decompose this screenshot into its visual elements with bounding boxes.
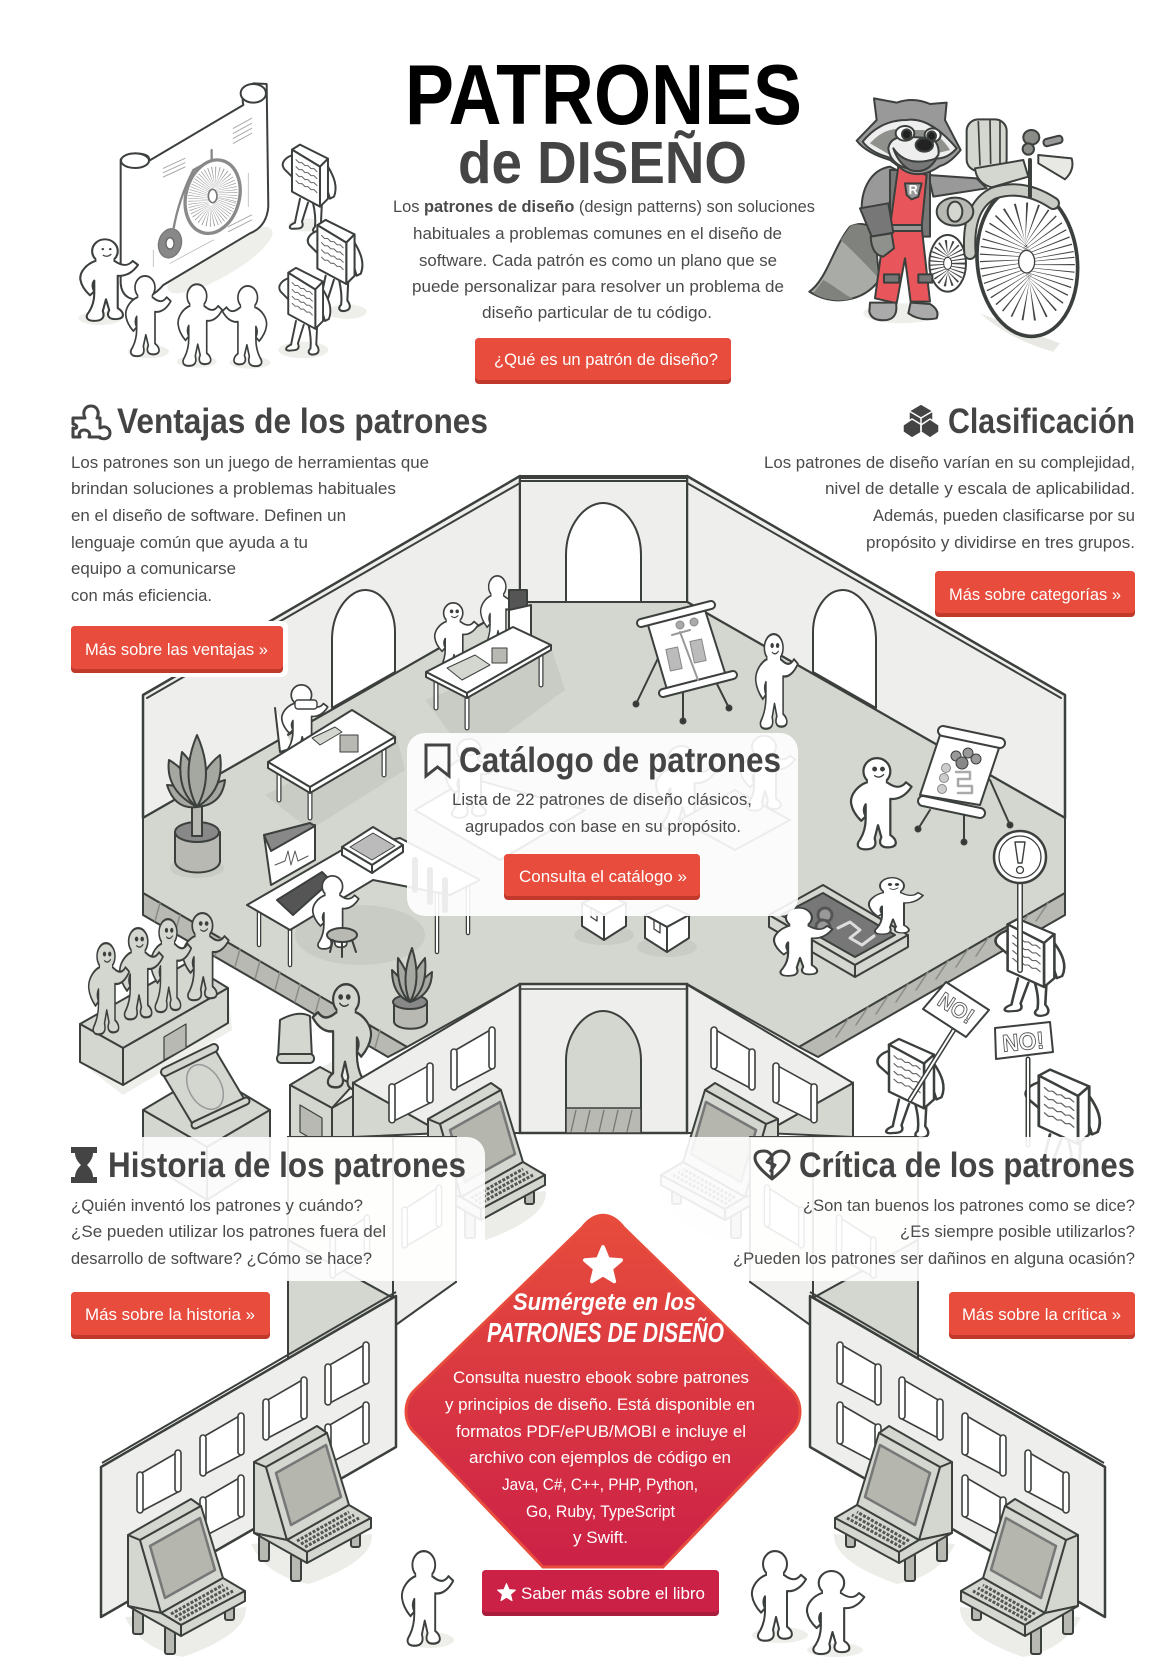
intro paragraph — [393, 197, 815, 322]
plant — [167, 735, 225, 878]
text: clasificacion: Los patrones de diseño varían en su complejidad, — [764, 453, 1135, 472]
button: que es un patron — [475, 338, 731, 384]
ebook text: formatos PDF/ePUB/MOBI e incluye el — [456, 1422, 746, 1441]
button: saber mas sobre el libro — [482, 1570, 719, 1616]
text: clasificacion — [764, 453, 1135, 552]
people near book button — [402, 1551, 864, 1657]
ebook text — [445, 1368, 755, 1547]
desk with masked person — [265, 685, 405, 830]
flipchart with design — [634, 605, 733, 724]
icon: puzzle — [73, 406, 110, 439]
panel: critica overlay — [655, 1137, 1149, 1281]
ebook heading: PATRONES DE DISEÑO — [487, 1317, 724, 1348]
ebook text: Java, C#, C++, PHP, Python, — [502, 1475, 698, 1494]
boxes — [574, 893, 697, 957]
button: critica: Más sobre la crítica » — [962, 1305, 1121, 1324]
paper characters — [283, 145, 336, 233]
protest character with NO! sign: NO! — [933, 987, 979, 1029]
panel: room illustration — [80, 476, 1100, 1200]
icon: star — [585, 1247, 621, 1281]
text: clasificacion: nivel de detalle y escala de aplicabilidad. — [825, 479, 1135, 498]
text: ventajas: lenguaje común que ayuda a tu — [71, 533, 308, 552]
text: ventajas: con más eficiencia. — [71, 586, 212, 605]
button: catalogo: Consulta el catálogo » — [519, 867, 687, 886]
title: PATRONES — [405, 48, 802, 143]
text: historia — [71, 1196, 386, 1268]
text: critica: ¿Es siempre posible utilizarlos? — [900, 1222, 1135, 1241]
blueprint sheet — [121, 83, 268, 299]
floor — [143, 602, 1065, 1047]
protest character with second NO! sign — [995, 1022, 1100, 1175]
kneeling person — [869, 878, 923, 934]
ebook heading: Sumérgete en los — [513, 1289, 696, 1316]
intro paragraph: Los patrones de diseño (design patterns) son soluciones — [393, 197, 815, 216]
ebook text: y Swift. — [573, 1528, 628, 1547]
second plant — [392, 948, 432, 1029]
statue group on pedestal — [80, 913, 232, 1095]
text: catalogo — [452, 790, 752, 836]
people — [80, 239, 138, 321]
button: saber mas sobre el libro: Saber más sobre el libro — [521, 1584, 705, 1603]
intro paragraph: puede personalizar para resolver un problema de — [412, 277, 784, 296]
icon: hourglass — [71, 1147, 97, 1183]
button: ventajas — [66, 621, 288, 677]
button: historia — [71, 1292, 270, 1339]
text: ventajas: equipo a comunicarse — [71, 559, 236, 578]
pedestal with scroll — [143, 1048, 270, 1200]
text: catalogo: agrupados con base en su propósito. — [465, 817, 741, 836]
person pointing — [851, 758, 912, 849]
heading: catalogo: Catálogo de patrones — [459, 741, 781, 780]
bicycle — [929, 235, 966, 292]
text: historia: desarrollo de software? ¿Cómo se hace? — [71, 1249, 372, 1268]
mascot: raccoon with penny-farthing: R — [909, 183, 918, 197]
workstation desk — [247, 823, 480, 965]
ebook text: y principios de diseño. Está disponible en — [445, 1395, 755, 1414]
front room — [353, 984, 853, 1241]
floor ledge stripes — [143, 893, 1065, 1057]
icon: broken heart — [755, 1151, 789, 1179]
text: ventajas: en el diseño de software. Definen un — [71, 506, 346, 525]
items behind catalogue card — [415, 736, 795, 910]
button: que es un patron: ¿Qué es un patrón de diseño? — [494, 350, 718, 369]
button: categorias: Más sobre categorías » — [949, 585, 1121, 604]
text: critica — [733, 1196, 1135, 1268]
warning sign character — [994, 831, 1064, 1016]
room walls — [143, 476, 1065, 818]
intro paragraph: diseño particular de tu código. — [482, 303, 712, 322]
panel: historia overlay — [60, 1137, 485, 1281]
person scratching head — [756, 634, 798, 729]
text: clasificacion: Además, pueden clasificarse por su — [873, 506, 1135, 525]
heading: ventajas: Ventajas de los patrones — [117, 402, 488, 441]
title — [405, 48, 802, 196]
intro paragraph: habituales a problemas comunes en el diseño de — [413, 224, 782, 243]
tail — [809, 224, 879, 300]
icon: bookmark — [426, 745, 449, 776]
statue with scroll on pedestal — [277, 984, 371, 1200]
text: critica: ¿Son tan buenos los patrones como se dice? — [803, 1196, 1135, 1215]
button: categorias — [935, 571, 1135, 617]
raccoon body — [928, 175, 987, 197]
ebook text: Consulta nuestro ebook sobre patrones — [453, 1368, 749, 1387]
icon: cubes — [903, 404, 939, 438]
person at circuit board — [774, 908, 832, 976]
text: critica: ¿Pueden los patrones ser dañinos en alguna ocasión? — [733, 1249, 1135, 1268]
text: ventajas: Los patrones son un juego de herramientas que — [71, 453, 429, 472]
button: ventajas: Más sobre las ventajas » — [85, 640, 268, 659]
header illustration: people around blueprint — [78, 83, 367, 369]
protest character with second NO! sign: NO! — [1001, 1027, 1045, 1058]
panel: catalogo card — [407, 733, 798, 916]
ebook heading — [487, 1289, 724, 1348]
intro paragraph: software. Cada patrón es como un plano que se — [419, 251, 777, 270]
ebook text: archivo con ejemplos de código en — [469, 1448, 731, 1467]
text: catalogo: Lista de 22 patrones de diseño clásicos, — [452, 790, 752, 809]
protest character with NO! sign — [877, 982, 989, 1138]
button: historia: Más sobre la historia » — [85, 1305, 255, 1324]
right flipchart — [916, 731, 1012, 844]
heading: historia: Historia de los patrones — [108, 1146, 466, 1185]
desk with two people — [425, 576, 565, 760]
mascot: raccoon with penny-farthing — [809, 98, 1085, 352]
lower left room with terminals — [101, 1137, 456, 1657]
text: historia: ¿Se pueden utilizar los patrones fuera del — [71, 1222, 386, 1241]
title: de DISEÑO — [458, 130, 747, 196]
text: ventajas: brindan soluciones a problemas habituales — [71, 479, 396, 498]
button: catalogo — [504, 854, 700, 900]
raccoon head — [857, 98, 961, 174]
circuit board box — [769, 885, 908, 977]
text: historia: ¿Quién inventó los patrones y cuándo? — [71, 1196, 363, 1215]
panel: ebook diamond — [406, 1215, 800, 1567]
text: clasificacion: propósito y dividirse en tres grupos. — [866, 533, 1135, 552]
lower right room with terminals — [750, 1137, 1105, 1657]
button: critica — [949, 1292, 1135, 1339]
text: ventajas — [71, 453, 429, 605]
ebook text: Go, Ruby, TypeScript — [526, 1502, 675, 1521]
